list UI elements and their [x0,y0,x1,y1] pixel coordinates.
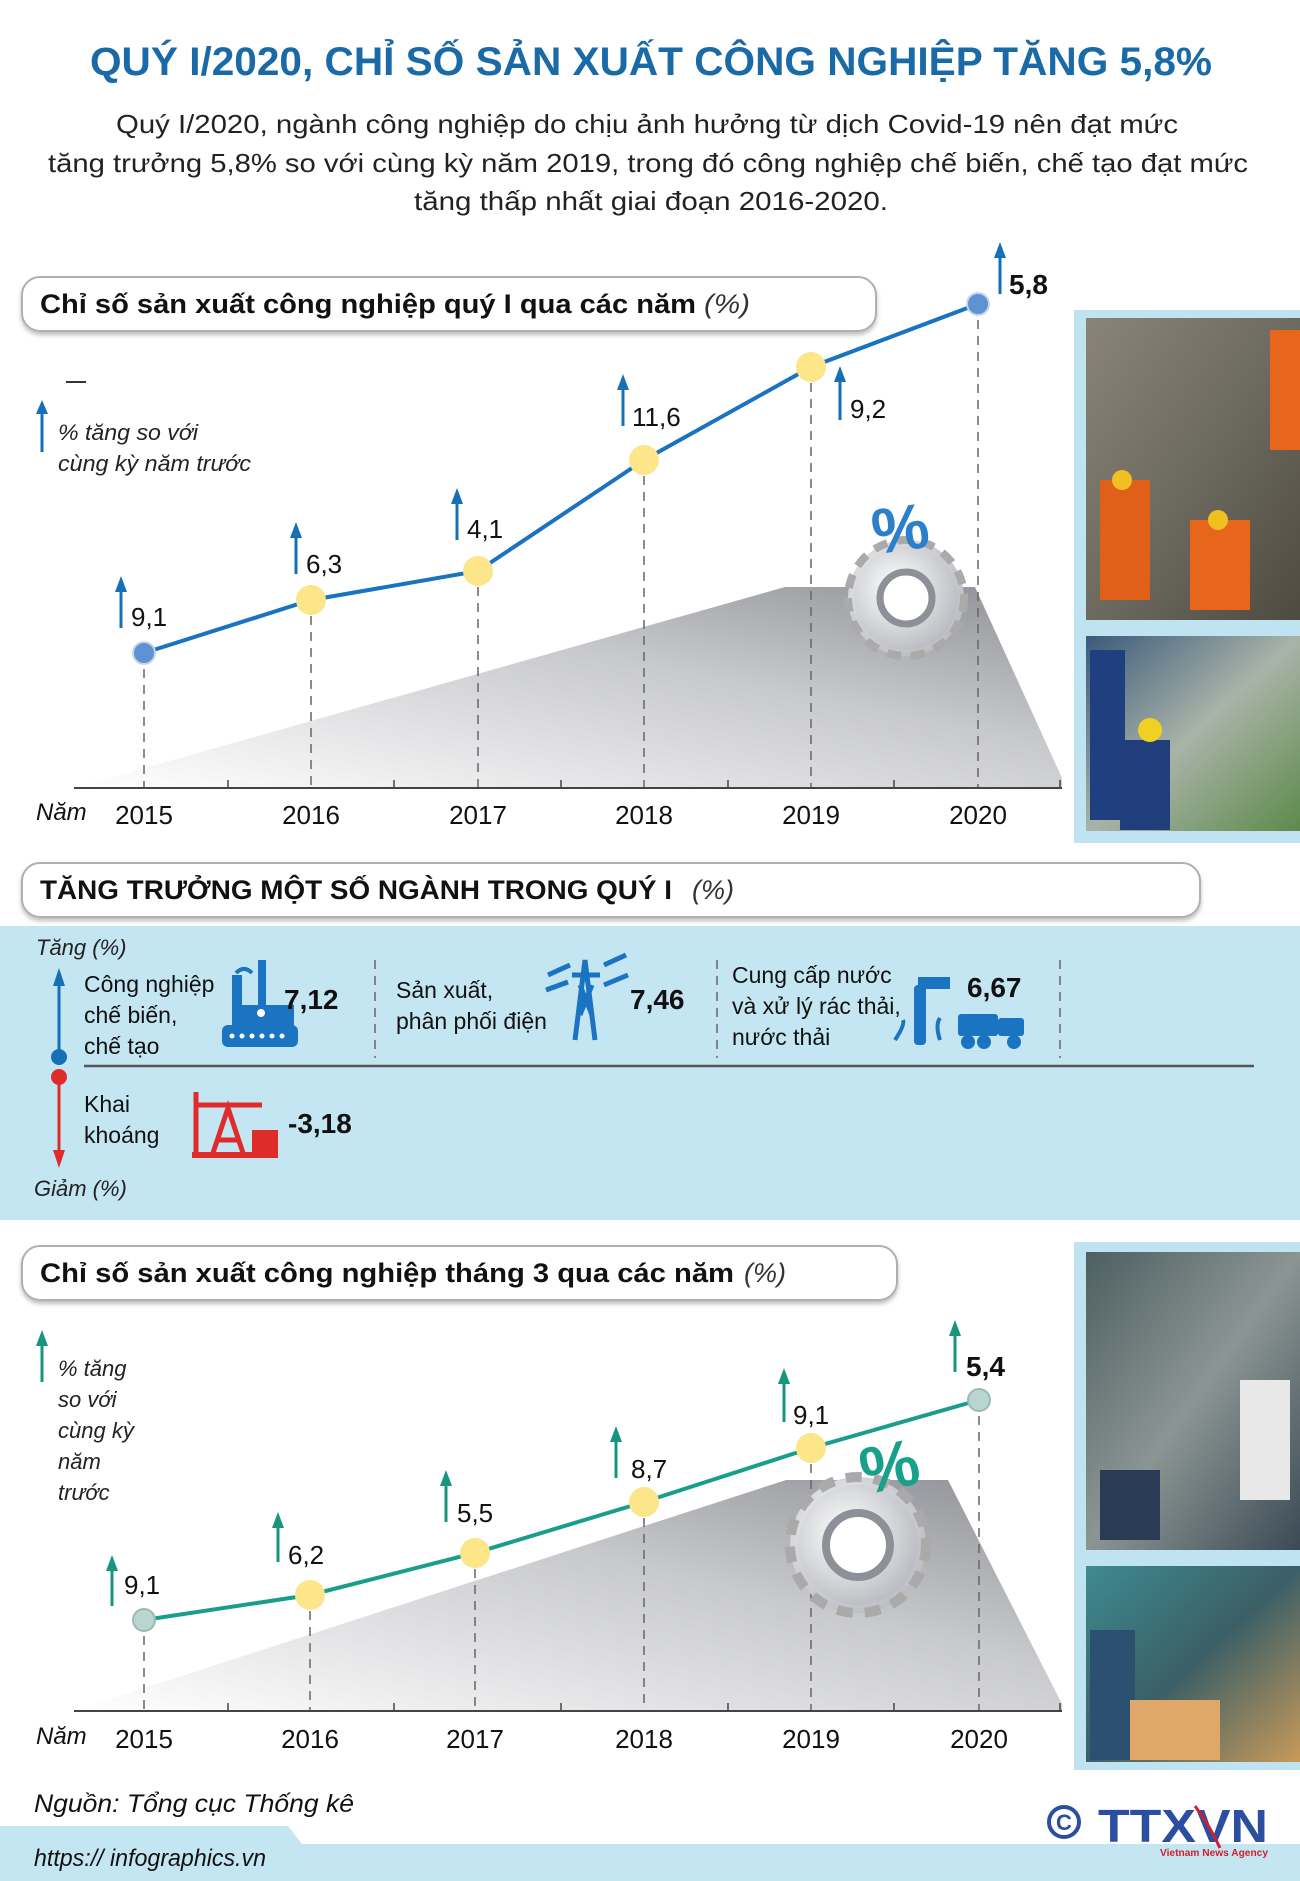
subtitle: tăng trưởng 5,8% so với cùng kỳ năm 2019, trong đó công nghiệp chế biến, chế tạo đạt mức [48,148,1248,178]
chart 1: line chart: 2016 [282,800,340,830]
item: mining: khoáng [84,1122,159,1148]
source: Nguồn: Tổng cục Thống kê [34,1790,354,1818]
footer band: https:// infographics.vn [34,1845,266,1872]
logo: TTXVN: C [1056,1810,1072,1835]
chart 1: line chart: Năm [36,799,87,826]
chart 2: line chart: 8,7 [631,1454,667,1484]
legend: chart 1: % tăng so với [58,420,199,445]
panel: sector growth: Giảm (%) [34,1176,127,1201]
chart 1: line chart: 2019 [782,800,840,830]
chart 1: line chart: 2015 [115,800,173,830]
legend: chart 2: so với [58,1387,118,1412]
chart 2: line chart: 5,5 [457,1498,493,1528]
chart 2: line chart: 2020 [950,1724,1008,1754]
item: water supply: Cung cấp nước [732,962,892,988]
chart 1: line chart: 9,2 [850,394,886,424]
chart 2: line chart: 9,1 [124,1570,160,1600]
logo: TTXVN: Vietnam News Agency [1160,1848,1268,1859]
legend: chart 2: % tăng [58,1356,127,1381]
chart 1: line chart: 2018 [615,800,673,830]
item: manufacturing: chế tạo [84,1033,159,1059]
panel: section 2 header: (%) [692,875,734,905]
item: manufacturing: Công nghiệp [84,971,214,997]
subtitle: tăng thấp nhất giai đoạn 2016-2020. [414,186,888,216]
chart 2: line chart: 2018 [615,1724,673,1754]
item: manufacturing: 7,12 [284,984,338,1015]
panel: chart 1 header [22,277,876,331]
icon: gear with percent: % [867,489,933,568]
title: QUÝ I/2020, CHỈ SỐ SẢN XUẤT CÔNG NGHIỆP TĂNG 5,8% [90,38,1212,84]
chart 2: line chart: 9,1 [793,1400,829,1430]
axis arrows [51,968,67,1168]
panel: chart 1 header: Chỉ số sản xuất công nghiệp quý I qua các năm [40,289,696,319]
logo: TTXVN: TTXVN [1098,1800,1268,1852]
subtitle: Quý I/2020, ngành công nghiệp do chịu ảnh hưởng từ dịch Covid-19 nên đạt mức [116,109,1178,139]
subtitle [48,109,1248,216]
panel: section 2 header: TĂNG TRƯỞNG MỘT SỐ NGÀNH TRONG QUÝ I [40,873,672,905]
panel: section 2 header [22,863,1200,917]
chart 1: line chart: 5,8 [1009,269,1048,300]
chart 2: line chart: 5,4 [966,1351,1005,1382]
item: manufacturing: chế biến, [84,1002,177,1028]
icon: gear with percent teal: % [853,1424,926,1508]
chart 2: line chart [36,1320,1062,1754]
chart 2: line chart: Năm [36,1723,87,1750]
panel: photos bottom [1074,1242,1300,1770]
item: electricity: Sản xuất, [396,977,493,1003]
item: water supply: nước thải [732,1024,830,1050]
chart 2: line chart: 2015 [115,1724,173,1754]
item: water supply [732,962,1024,1050]
icon: gear with percent teal [790,1424,926,1613]
legend: chart 1 [36,382,251,476]
icon: gear with percent [848,489,964,656]
chart 1: line chart [36,242,1062,830]
item: water supply: và xử lý rác thải, [732,993,901,1019]
panel: photos top [1074,310,1300,843]
chart 2: line chart: 6,2 [288,1540,324,1570]
legend: chart 2 [36,1330,136,1505]
item: mining [84,1091,352,1158]
item: mining: -3,18 [288,1108,352,1139]
panel: sector growth [0,926,1300,1220]
chart 1: line chart: 11,6 [632,402,681,432]
panel: chart 2 header: Chỉ số sản xuất công nghiệp tháng 3 qua các năm [40,1258,734,1288]
chart 1: line chart: 2020 [949,800,1007,830]
item: water supply: 6,67 [967,972,1022,1003]
panel: sector growth: Tăng (%) [36,935,126,960]
item: electricity: phân phối điện [396,1008,547,1034]
legend: chart 2: năm [58,1449,101,1474]
item: mining: Khai [84,1091,130,1117]
chart 1: line chart: 2017 [449,800,507,830]
panel: chart 2 header [22,1246,897,1300]
chart 1: line chart: 6,3 [306,549,342,579]
chart 2: line chart: 2016 [281,1724,339,1754]
item: electricity: 7,46 [630,984,684,1015]
legend: chart 2: cùng kỳ [58,1418,136,1443]
legend: chart 1: cùng kỳ năm trước [58,451,251,476]
logo: TTXVN [1049,1800,1268,1859]
panel: chart 1 header: (%) [704,289,750,319]
chart 1: line chart: 4,1 [467,514,503,544]
legend: chart 2: trước [58,1480,110,1505]
panel: chart 2 header: (%) [744,1258,786,1288]
chart 1: line chart: 9,1 [131,602,167,632]
chart 2: line chart: 2019 [782,1724,840,1754]
footer band [0,1826,1300,1881]
item: manufacturing [84,960,338,1059]
chart 2: line chart: 2017 [446,1724,504,1754]
item: electricity [396,955,684,1040]
